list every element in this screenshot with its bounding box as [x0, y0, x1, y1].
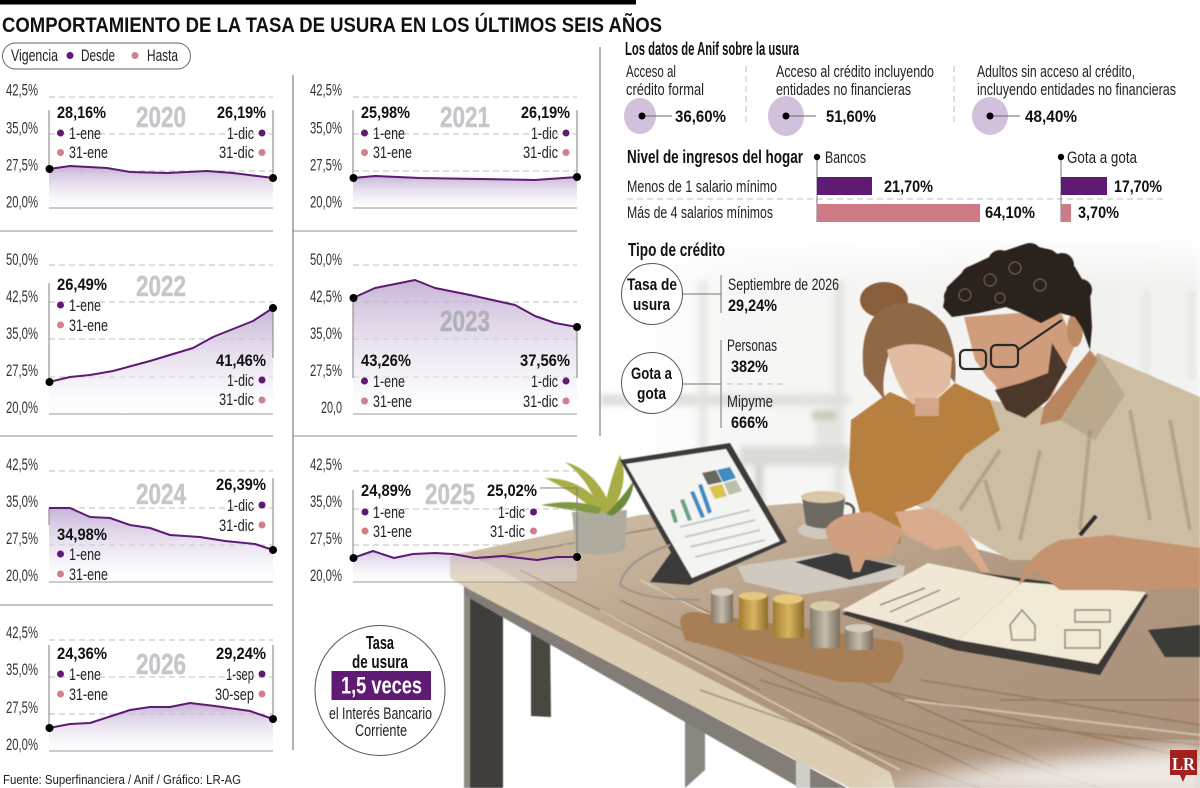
chart: 2022: 2022: [136, 271, 186, 303]
photo: man's curly hair: [943, 243, 1092, 350]
photo: woman's hair and face: [860, 282, 956, 416]
panel: tipo de crédito: [622, 240, 839, 432]
chart: 2023: 31-dic: [523, 393, 558, 411]
chart: 2026: 31-ene: [69, 686, 108, 704]
chart: 2024: 1-dic: [227, 497, 254, 515]
bar chart: bancos: [814, 149, 1035, 222]
photo: man's curls highlights: [959, 262, 1046, 303]
photo: calculator: [737, 553, 905, 595]
bar chart: gota a gota: 17,70%: [1114, 177, 1162, 196]
chart: 2022: 50,0%: [6, 251, 38, 269]
chart: 2026: 20,0%: [6, 736, 38, 754]
photo: notebook: [842, 563, 1148, 675]
bar chart: bancos: 64,10%: [985, 203, 1035, 222]
chart: 2021: 42,5%: [310, 82, 342, 100]
chart: 2024: 34,98%: [57, 525, 107, 544]
panel: datos de Anif: [624, 39, 1176, 136]
item: tasa de usura: Tasa de: [627, 275, 677, 294]
chart: 2021: 27,5%: [310, 156, 342, 174]
chart: 2020: 31-ene: [69, 144, 108, 162]
chart: 2023: 20,0: [321, 399, 342, 417]
chart: 2022: 41,46%: [216, 351, 266, 370]
chart: 2025: 42,5%: [310, 456, 342, 474]
heading: ingresos: Nivel de ingresos del hogar: [627, 147, 803, 167]
item: gota a gota: Mipyme: [727, 393, 773, 411]
chart: 2020: 20,0%: [6, 194, 38, 212]
chart: 2026: 35,0%: [6, 661, 38, 679]
stat: adultos sin acceso: Adultos sin acceso al crédito,: [977, 63, 1135, 81]
chart: 2022: 27,5%: [6, 362, 38, 380]
chart: 2026: 1-ene: [69, 666, 101, 684]
chart: 2022: 42,5%: [6, 288, 38, 306]
chart: 2024: 26,39%: [216, 475, 266, 494]
chart: 2025: 35,0%: [310, 493, 342, 511]
chart: 2022: 1-dic: [227, 372, 254, 390]
bar chart: gota a gota: 3,70%: [1078, 203, 1119, 222]
callout: tasa de usura 1,5 veces: de usura: [352, 652, 409, 672]
chart: 2026: 2026: [136, 649, 186, 681]
stat: crédito formal: Acceso al: [626, 63, 676, 81]
chart: 2020: 1-dic: [227, 125, 254, 143]
photo: potted plant: [541, 455, 634, 555]
chart: 2026: 42,5%: [6, 624, 38, 642]
chart: 2022: 35,0%: [6, 325, 38, 343]
item: gota a gota: gota: [637, 384, 666, 403]
chart: 2026: 24,36%: [57, 644, 107, 663]
chart: 2025: 24,89%: [361, 481, 411, 500]
chart: 2025: 27,5%: [310, 530, 342, 548]
callout: tasa de usura 1,5 veces: Tasa: [366, 633, 395, 653]
stat: crédito formal: crédito formal: [626, 81, 704, 99]
photo: hands on calculator and notebook: [825, 508, 990, 572]
item: tasa de usura: usura: [633, 295, 670, 314]
chart: 2024: 31-ene: [69, 566, 108, 584]
chart: 2021: 1-dic: [531, 125, 558, 143]
chart: 2025: [310, 456, 581, 585]
photo: couple reviewing finances at a wooden table: [450, 235, 1200, 788]
legend: vigencia: [2, 43, 190, 69]
bar chart: gota a gota: Gota a gota: [1067, 149, 1138, 167]
chart: 2025: 20,0%: [310, 567, 342, 585]
stat: crédito formal: [624, 63, 726, 134]
chart: 2020: 28,16%: [57, 103, 106, 122]
photo: bottom-right fade: [860, 745, 1200, 788]
chart: 2020: 26,19%: [217, 103, 266, 122]
chart: 2024: 27,5%: [6, 530, 38, 548]
chart: 2024: [6, 456, 277, 585]
chart: 2026: 1-sep: [226, 666, 254, 684]
stat: crédito formal: 36,60%: [675, 107, 726, 126]
photo: bright window background: [590, 235, 1200, 560]
chart: 2022: 20,0%: [6, 399, 38, 417]
stat: adultos sin acceso: 48,40%: [1025, 107, 1077, 126]
chart: 2020: 31-dic: [219, 144, 254, 162]
chart: 2023: 35,0%: [310, 325, 342, 343]
bar chart: bancos: 21,70%: [884, 177, 933, 196]
chart: 2024: 20,0%: [6, 567, 38, 585]
source line: Fuente: Superfinanciera / Anif / Gráfico: LR-AG: [3, 772, 241, 787]
chart: 2023: [310, 251, 581, 417]
chart: 2025: 2025: [425, 479, 475, 511]
callout: tasa de usura 1,5 veces: [315, 626, 445, 756]
chart: 2025: 31-ene: [373, 523, 412, 541]
photo: man's shirt: [916, 353, 1200, 560]
chart: 2023: 50,0%: [310, 251, 342, 269]
chart: 2026: [6, 624, 277, 754]
callout: tasa de usura 1,5 veces: el Interés Bancario: [329, 705, 432, 723]
item: gota a gota: Personas: [727, 337, 777, 355]
chart: 2023: 31-ene: [373, 393, 412, 411]
panel: nivel de ingresos del hogar: [627, 147, 1163, 222]
chart: 2023: 2023: [440, 306, 490, 338]
chart: 2021: 35,0%: [310, 120, 342, 138]
item: tasa de usura: [622, 264, 839, 324]
chart: 2022: 1-ene: [69, 297, 101, 315]
legend: vigencia: Desde: [81, 47, 115, 65]
chart: 2025: 25,02%: [487, 481, 537, 500]
photo: wooden table top: [450, 503, 1200, 788]
photo: coffee cup: [798, 491, 854, 539]
chart: 2021: 1-ene: [373, 125, 405, 143]
photo: woman's shirt: [849, 383, 1000, 545]
chart: 2020: 27,5%: [6, 156, 38, 174]
chart: 2021: 31-ene: [373, 144, 412, 162]
chart: 2021: 25,98%: [361, 103, 410, 122]
chart: 2026: 30-sep: [215, 686, 254, 704]
item: gota a gota: Gota a: [631, 364, 672, 383]
stat: adultos sin acceso: [972, 63, 1176, 135]
chart: 2021: 2021: [440, 102, 490, 134]
chart: 2023: 43,26%: [361, 351, 411, 370]
logo: LR: LR: [1172, 754, 1196, 774]
column dividers: [293, 47, 600, 750]
stat: entidades no financieras: entidades no financieras: [776, 81, 911, 99]
photo: coins on wooden tray: [680, 588, 904, 683]
chart: 2024: 42,5%: [6, 456, 38, 474]
item: gota a gota: [622, 337, 787, 432]
legend: vigencia: Hasta: [147, 47, 179, 65]
item: gota a gota: 382%: [731, 357, 768, 376]
chart: 2022: 31-dic: [219, 391, 254, 409]
chart: 2021: 20,0%: [310, 194, 342, 212]
bar chart: gota a gota: [1058, 149, 1162, 222]
title: COMPORTAMIENTO DE LA TASA DE USURA EN LOS ÚLTIMOS SEIS AÑOS: [2, 12, 662, 37]
chart: 2021: [310, 82, 581, 212]
legend: vigencia: Vigencia: [11, 47, 59, 65]
chart: 2020: [6, 82, 277, 212]
chart: 2026: 27,5%: [6, 699, 38, 717]
item: gota a gota: 666%: [731, 413, 768, 432]
chart: 2025: 1-ene: [373, 504, 405, 522]
stat: entidades no financieras: Acceso al crédito incluyendo: [776, 63, 934, 81]
bar chart: bancos: Bancos: [825, 149, 866, 167]
callout: tasa de usura 1,5 veces: Corriente: [355, 722, 407, 740]
logo: LR: [1170, 750, 1197, 782]
photo: man's writing hand and forearm: [1019, 516, 1200, 590]
item: tasa de usura: 29,24%: [728, 296, 777, 315]
panel: nivel de ingresos del hogar: Más de 4 salarios mínimos: [627, 204, 773, 222]
heading: tipo de crédito: Tipo de crédito: [628, 240, 725, 260]
item: tasa de usura: Septiembre de 2026: [728, 276, 839, 294]
stat: entidades no financieras: [768, 63, 934, 136]
photo: man's neck and face: [964, 310, 1098, 425]
chart: 2025: 1-dic: [498, 504, 525, 522]
chart: 2023: 37,56%: [520, 351, 570, 370]
chart: 2023: 42,5%: [310, 288, 342, 306]
chart: 2020: 42,5%: [6, 82, 38, 100]
photo: bank card: [1148, 625, 1200, 657]
chart: 2023: 1-ene: [373, 373, 405, 391]
chart: 2020: 1-ene: [69, 125, 101, 143]
chart: 2026: 29,24%: [216, 644, 266, 663]
chart: 2022: 26,49%: [57, 275, 107, 294]
callout: tasa de usura 1,5 veces: 1,5 veces: [341, 672, 422, 700]
panel: nivel de ingresos del hogar: Menos de 1 salario mínimo: [627, 178, 777, 196]
chart: 2021: 31-dic: [523, 144, 558, 162]
heading: Anif: Los datos de Anif sobre la usura: [625, 39, 800, 59]
chart: 2024: 31-dic: [219, 517, 254, 535]
chart: 2024: 35,0%: [6, 493, 38, 511]
chart: 2024: 2024: [136, 479, 186, 511]
photo: table legs: [464, 583, 847, 788]
chart: 2020: 2020: [136, 102, 186, 134]
chart: 2020: 35,0%: [6, 120, 38, 138]
stat: entidades no financieras: 51,60%: [826, 107, 876, 126]
top black rule: [0, 0, 636, 4]
chart: 2022: [6, 251, 277, 417]
chart: 2023: 27,5%: [310, 362, 342, 380]
photo: tablet with charts: [620, 443, 787, 600]
chart: 2024: 1-ene: [69, 546, 101, 564]
chart: 2021: 26,19%: [521, 103, 570, 122]
chart: 2022: 31-ene: [69, 317, 108, 335]
photo: man's glasses: [960, 320, 1062, 369]
chart: 2025: 31-dic: [490, 523, 525, 541]
chart: 2023: 1-dic: [531, 373, 558, 391]
